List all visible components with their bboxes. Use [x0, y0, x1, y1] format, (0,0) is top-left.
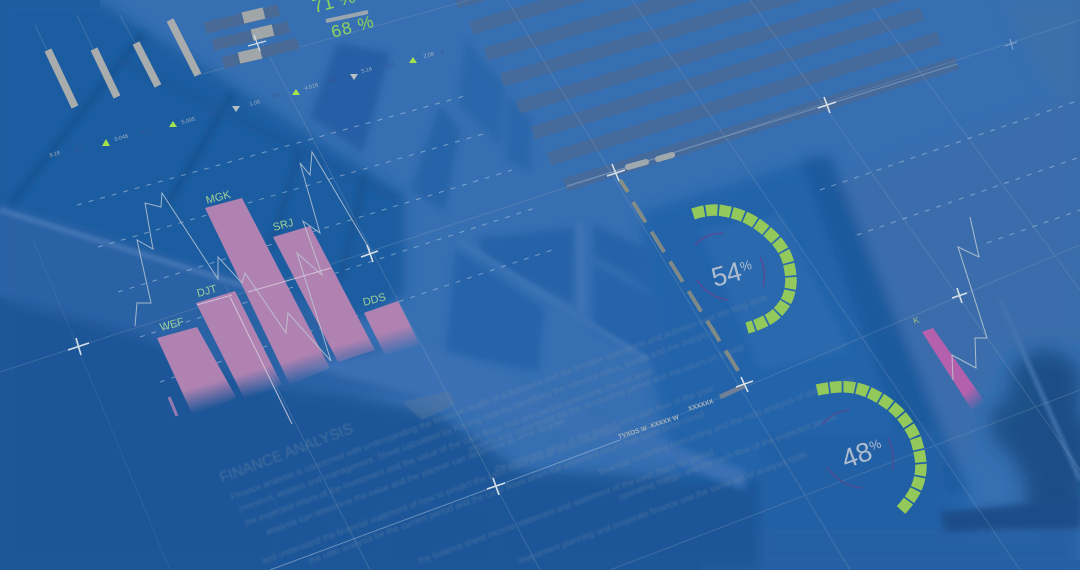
body text: blurred finance analysis paragraphs: financial modelling forecasting and the ratio analysis of the company	[597, 372, 856, 477]
ticker row: triangles and tiny values: 5.16	[361, 66, 373, 75]
gauge: 48 percent	[817, 387, 921, 510]
body text: blurred finance analysis paragraphs: reports and statements for the accounting period and the return on capital	[467, 342, 745, 454]
legend: small tags above the paragraph	[617, 398, 715, 441]
ticker row: triangles and tiny values: 8.18	[49, 150, 61, 159]
bar labels: DDS	[362, 291, 387, 309]
gauge value: 54	[708, 256, 745, 293]
ticker row: triangles and tiny values: 7.4	[207, 110, 216, 118]
body text: blurred finance analysis paragraphs: operating margin and the cash flow of the expected period	[617, 411, 838, 502]
bar labels	[159, 189, 387, 334]
chart: single pink bar K: K	[912, 315, 920, 326]
bar labels: MGK	[205, 189, 233, 207]
gauge arc	[693, 210, 791, 328]
inner purple arcs	[695, 233, 764, 300]
legend: small tags above the paragraph: XXXXX W	[649, 414, 681, 430]
grid: dashed trend lines	[77, 95, 1080, 382]
body text: blurred finance analysis paragraphs: the company value of the market and cash flow of the year	[493, 383, 715, 474]
axis: dashed tan line between crosses	[620, 180, 744, 397]
bar: SRJ	[273, 226, 375, 362]
ticker row: triangles and tiny values: 8.4	[328, 77, 337, 85]
chart: single pink bar K	[912, 315, 985, 410]
ticker row: triangles and tiny values: 0.048	[114, 134, 129, 143]
ticker row: triangles and tiny values: 4	[440, 49, 444, 56]
bar labels: DJT	[196, 283, 219, 300]
body text: blurred finance analysis paragraphs: analysis can determine the value and the planner can determine to what degree	[264, 416, 565, 537]
body text: blurred finance analysis paragraphs: investors, lenders and management. Sheet calculated by Kissing data by identifying the relevant ratios, trends and the margin of	[237, 326, 719, 514]
grid: bright line through lower cross	[270, 440, 620, 570]
body text: blurred finance analysis paragraphs: and understand the financial statement of how to predict the cash flows and all associated ratios	[260, 422, 622, 566]
body text: blurred finance analysis paragraphs	[217, 292, 856, 566]
markers: grid crosses	[68, 35, 1017, 495]
gauge value: %	[738, 257, 754, 274]
ticker row: triangles and tiny values: 2.08	[423, 51, 435, 60]
body text: blurred finance analysis paragraphs: investment planning and corporate finance use the same set of analysis tools	[517, 449, 809, 566]
bar: WEF	[157, 327, 236, 420]
panel: top right horizontal bar table	[456, 0, 957, 185]
gauge: 54 percent	[693, 210, 791, 328]
bar: DJT	[196, 291, 282, 400]
dark tag behind heading	[402, 391, 455, 420]
ticker row: triangles and tiny values: 1.05	[249, 99, 261, 108]
chart: left line chart	[135, 152, 370, 361]
body text: blurred finance analysis paragraphs: the expected return of the investment and the value of the cash flows that are used to determine the risk level	[243, 366, 654, 528]
ticker row: triangles and tiny values: 5.005	[181, 117, 196, 126]
ticker row: triangles and tiny values: 8.1	[75, 146, 84, 154]
ticker row: triangles and tiny values: 3.5	[272, 92, 281, 100]
bar: DDS	[364, 301, 420, 355]
bar: MGK	[205, 198, 330, 385]
legend: small tags above the paragraph: XXXXXX	[687, 398, 715, 413]
legend: small label strip	[326, 12, 368, 21]
ticker row: triangles and tiny values: 6.1	[141, 128, 150, 136]
gauge value: %	[867, 436, 884, 454]
ticker row: triangles and tiny values: 6.1	[387, 61, 396, 69]
bar labels: SRJ	[272, 217, 295, 234]
bar: small stub	[169, 397, 177, 416]
body text: blurred finance analysis paragraphs: the balance sheet income statement and statement of the cash flows for period	[417, 446, 715, 566]
gauge arc	[817, 387, 921, 510]
stat: 68 percent: 68 %	[329, 11, 376, 42]
ticker row: triangles and tiny values	[49, 49, 444, 159]
chart: top right progress pills	[567, 64, 957, 186]
body text: blurred finance analysis paragraphs: Finance analysis is concerned with understanding the financial health of a business and the broader operations and activities over the long term	[229, 292, 768, 502]
ticker row: triangles and tiny values: 4.018	[304, 83, 319, 92]
gauge value: 48	[838, 436, 876, 474]
chart: right line chart	[952, 217, 987, 380]
chart: small gray vertical bars top left	[48, 20, 198, 107]
bar labels: WEF	[159, 316, 186, 334]
body text: blurred finance analysis paragraphs: FINANCE ANALYSIS	[217, 420, 355, 487]
body text: blurred finance analysis paragraphs: the ratio analysis for the current period and the cash flows when the expected return has been determined	[307, 409, 706, 566]
grid: bright ticks across bars	[197, 268, 331, 424]
legend: small tags above the paragraph: TVXOS W	[617, 425, 649, 441]
chart: range bars top centre	[205, 10, 298, 63]
inner purple arcs	[822, 410, 893, 488]
chart: pink bar chart	[157, 189, 420, 420]
